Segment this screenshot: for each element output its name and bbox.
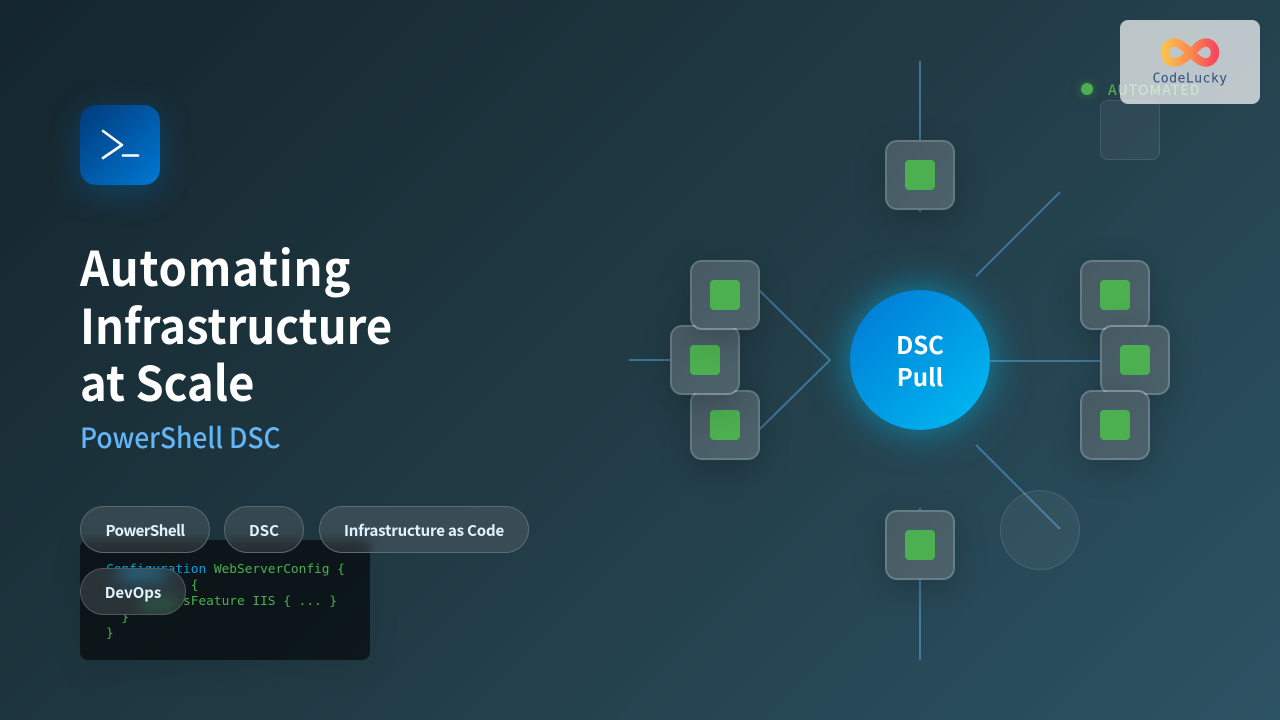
central hub: DSC Pull: DSC xyxy=(896,326,944,361)
tag: DSC xyxy=(224,506,304,553)
tag: PowerShell: PowerShell xyxy=(105,520,185,541)
tag: PowerShell xyxy=(80,506,210,553)
status label: AUTOMATED xyxy=(1108,80,1201,100)
central hub: DSC Pull xyxy=(850,290,990,430)
title xyxy=(80,230,392,415)
code snippet panel: Configuration WebServerConfig { Node web { WindowsFeature IIS { ... } } } xyxy=(106,562,345,641)
title: at Scale xyxy=(80,345,254,415)
node bottom xyxy=(885,510,955,580)
node left lower xyxy=(690,390,760,460)
node left upper xyxy=(690,260,760,330)
logo: CodeLucky xyxy=(1120,20,1260,104)
node right upper xyxy=(1080,260,1150,330)
tag: DevOps: DevOps xyxy=(105,582,161,603)
decorative square xyxy=(1100,100,1160,160)
code snippet panel xyxy=(80,540,370,660)
tag: DevOps xyxy=(80,568,186,615)
tag: DSC: DSC xyxy=(249,520,279,541)
decorative circle xyxy=(1000,490,1080,570)
tag: Infrastructure as Code: Infrastructure as Code xyxy=(344,520,504,541)
central hub: DSC Pull: Pull xyxy=(897,358,943,393)
tag: Infrastructure as Code xyxy=(319,506,529,553)
subtitle: PowerShell DSC xyxy=(80,417,281,457)
logo: CodeLucky: CodeLucky xyxy=(1152,72,1228,86)
node top xyxy=(885,140,955,210)
title: Infrastructure xyxy=(80,288,392,358)
icon: PowerShell prompt xyxy=(80,105,160,185)
status dot xyxy=(1081,83,1093,95)
node right lower xyxy=(1080,390,1150,460)
node right middle xyxy=(1100,325,1170,395)
title: Automating xyxy=(80,230,351,300)
node left middle xyxy=(670,325,740,395)
